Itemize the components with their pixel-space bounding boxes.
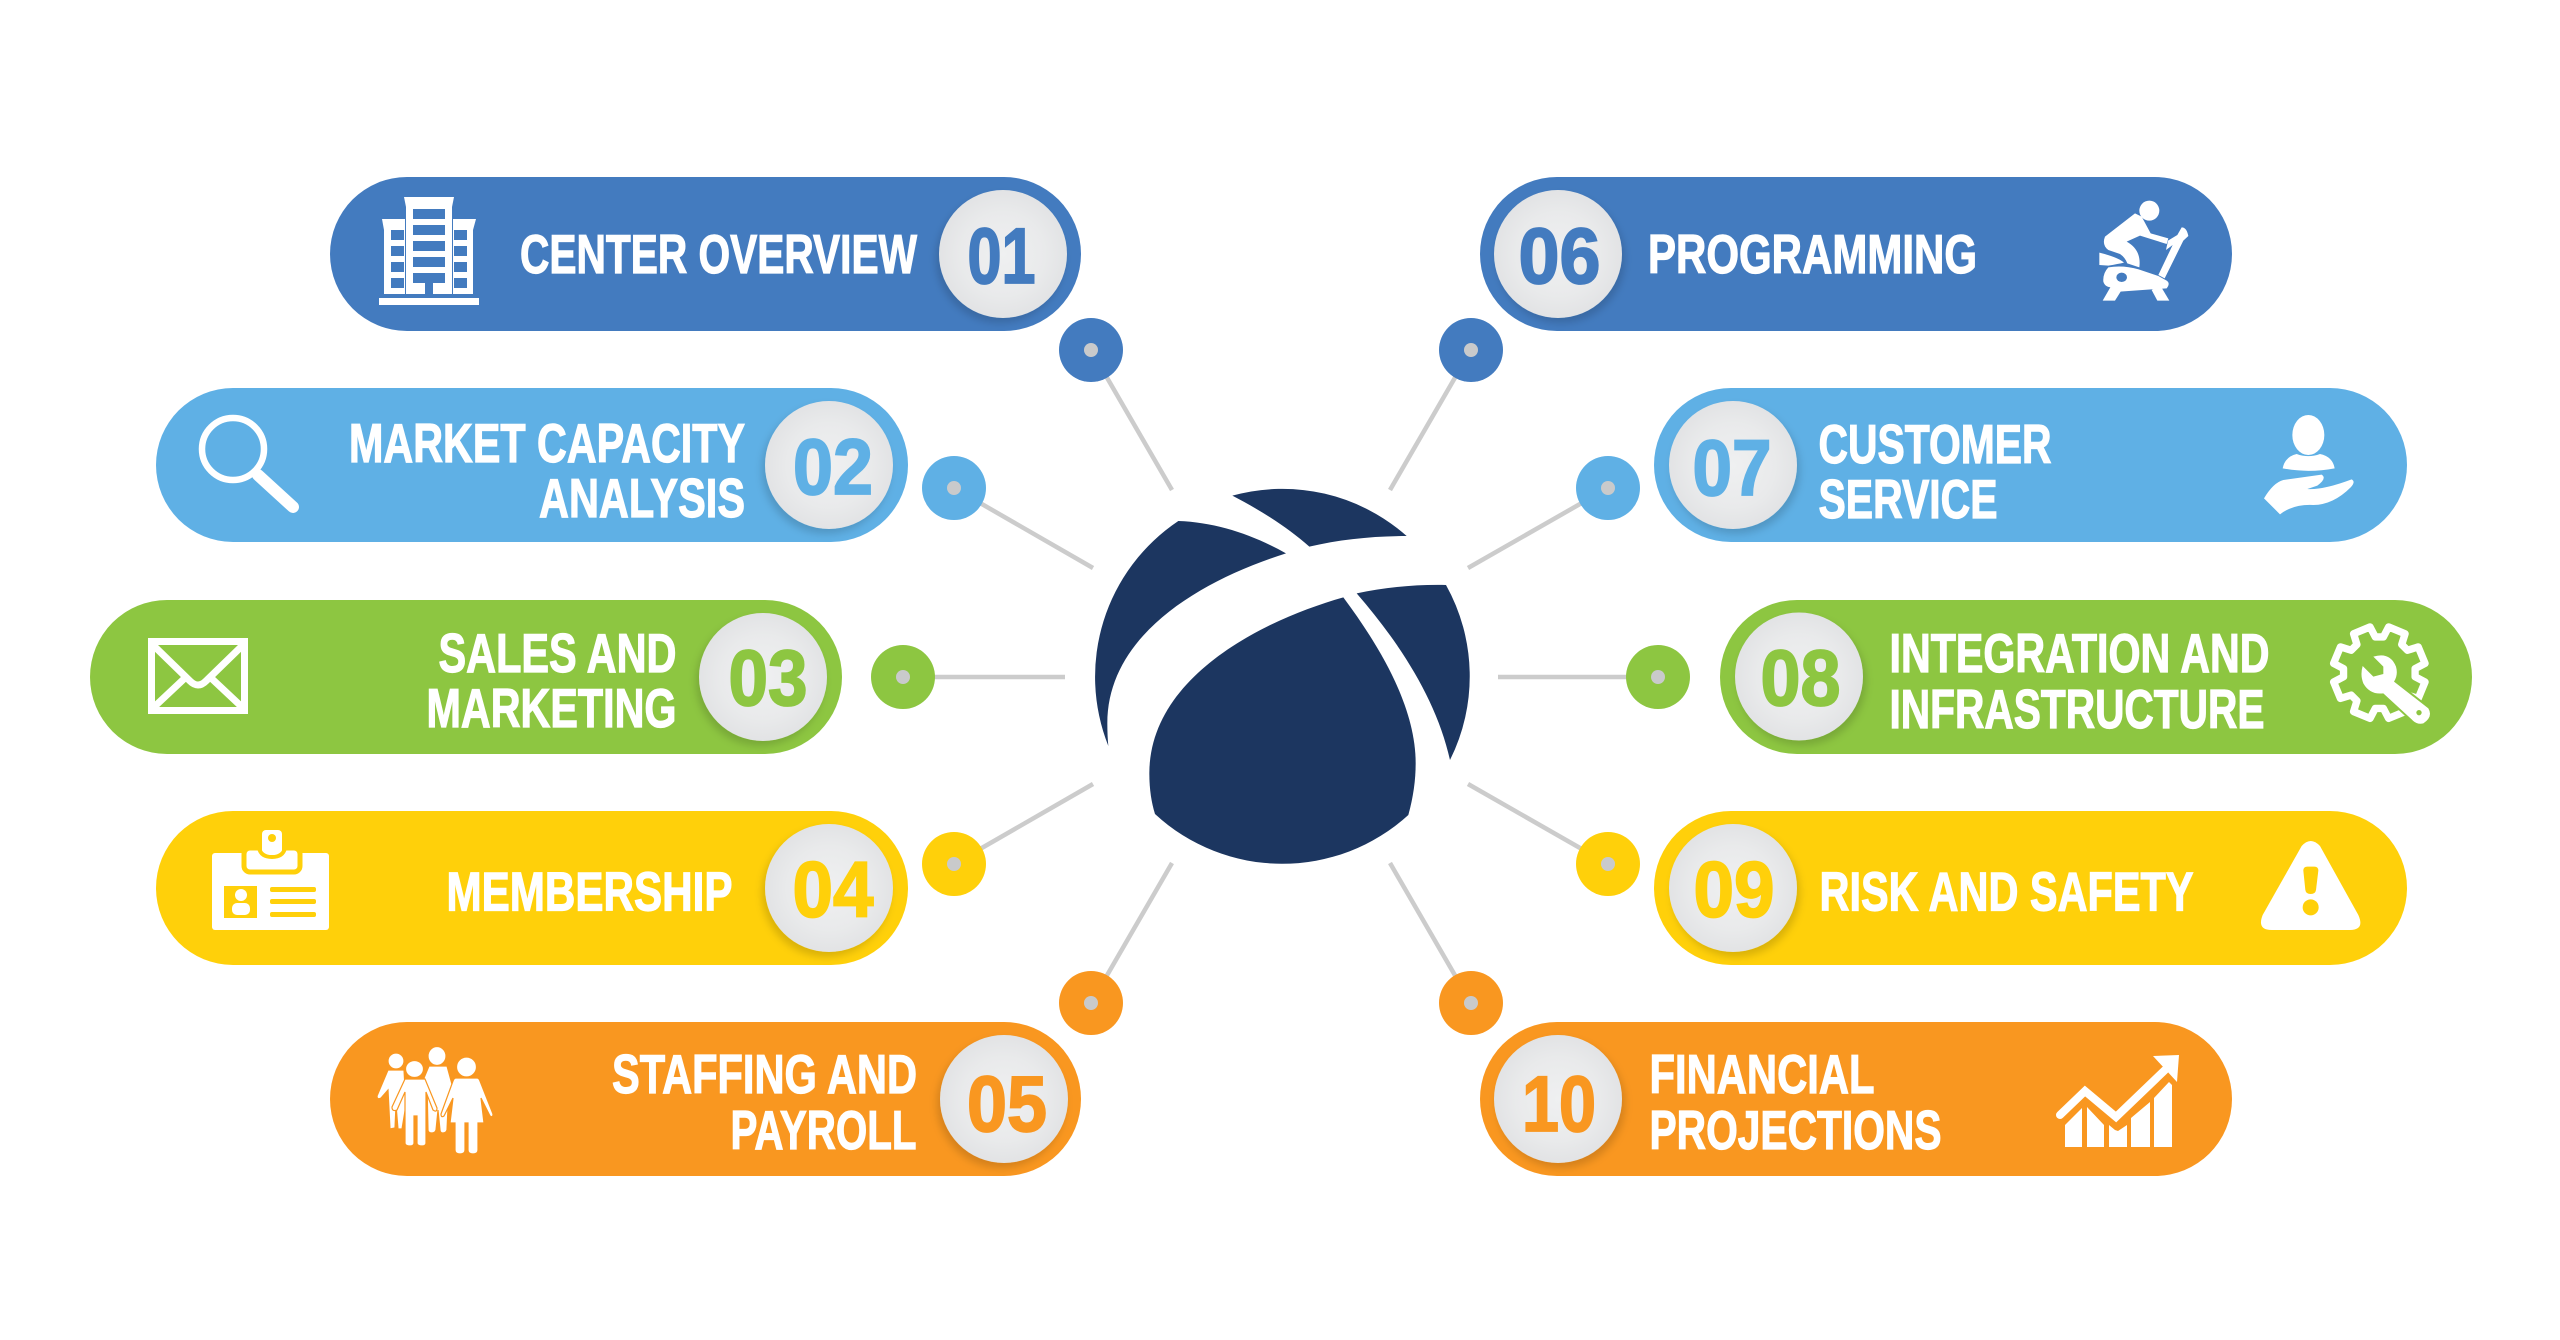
panel: 02 market capacity analysis: ANALYSIS: [539, 467, 745, 529]
panel: 04 membership: 04: [792, 844, 874, 934]
icon: envelope: [152, 642, 244, 710]
icon: exercise bike: [2099, 201, 2188, 301]
dot 04: [922, 832, 986, 896]
panel: 10 financial projections: FINANCIAL: [1650, 1043, 1874, 1105]
panel: 06 programming: [1480, 177, 2232, 331]
panel: 09 risk and safety: 09: [1694, 844, 1774, 934]
panel: 01 center overview: 01: [968, 211, 1036, 300]
panel: 01 center overview: CENTER OVERVIEW: [520, 223, 917, 285]
panel: 08 integration and infrastructure: [1720, 600, 2472, 754]
connector lines: [903, 350, 1658, 1003]
icon: rising chart: [2060, 1055, 2179, 1147]
panel: 09 risk and safety: [1654, 811, 2407, 965]
icon: id badge: [212, 830, 329, 930]
panel: 08 integration and infrastructure: 08: [1760, 633, 1840, 722]
dot 07: [1576, 456, 1640, 520]
panel: 07 customer service: [1654, 388, 2407, 542]
dot 05: [1059, 971, 1123, 1035]
panel: 02 market capacity analysis: [156, 388, 908, 542]
icon: gear and wrench: [2334, 627, 2430, 724]
panel: 07 customer service: 07: [1692, 423, 1772, 512]
panel: 03 sales and marketing: 03: [728, 633, 808, 722]
panel: 04 membership: [156, 811, 908, 965]
dot 06: [1439, 318, 1503, 382]
dot 01: [1059, 318, 1123, 382]
panel: 06 programming: PROGRAMMING: [1648, 223, 1977, 285]
dot 03: [871, 645, 935, 709]
panel: 03 sales and marketing: SALES AND: [438, 622, 676, 684]
dot 10: [1439, 971, 1503, 1035]
dot 02: [922, 456, 986, 520]
panel: 05 staffing and payroll: STAFFING AND: [612, 1043, 917, 1105]
panel: 05 staffing and payroll: [330, 1022, 1081, 1176]
icon: group of people: [377, 1046, 493, 1154]
icon: warning triangle: [2261, 841, 2360, 930]
panel: 02 market capacity analysis: 02: [793, 422, 873, 511]
panel: 08 integration and infrastructure: INTEGRATION AND: [1890, 622, 2270, 684]
panel: 07 customer service: CUSTOMER: [1818, 413, 2052, 475]
panel: 07 customer service: SERVICE: [1818, 468, 1998, 530]
panel: 05 staffing and payroll: 05: [967, 1059, 1047, 1148]
panel: 05 staffing and payroll: PAYROLL: [730, 1099, 916, 1161]
panel: 09 risk and safety: RISK AND SAFETY: [1820, 860, 2194, 922]
center logo: navy globe: [1095, 489, 1470, 864]
panel: 01 center overview: [330, 177, 1081, 331]
panel: 08 integration and infrastructure: INFRASTRUCTURE: [1890, 678, 2264, 740]
panel: 10 financial projections: PROJECTIONS: [1650, 1099, 1942, 1161]
dot 09: [1576, 832, 1640, 896]
dot 08: [1626, 645, 1690, 709]
panel: 03 sales and marketing: MARKETING: [426, 677, 676, 739]
panel: 04 membership: MEMBERSHIP: [446, 860, 732, 922]
panel: 10 financial projections: 10: [1522, 1059, 1596, 1148]
panel: 02 market capacity analysis: MARKET CAPACITY: [349, 412, 745, 474]
icon: building: [379, 197, 479, 305]
icon: magnifier: [202, 418, 293, 507]
icon: person on open hand: [2264, 415, 2354, 514]
panel: 03 sales and marketing: [90, 600, 842, 754]
panel: 10 financial projections: [1480, 1022, 2232, 1176]
panel: 06 programming: 06: [1518, 211, 1600, 300]
